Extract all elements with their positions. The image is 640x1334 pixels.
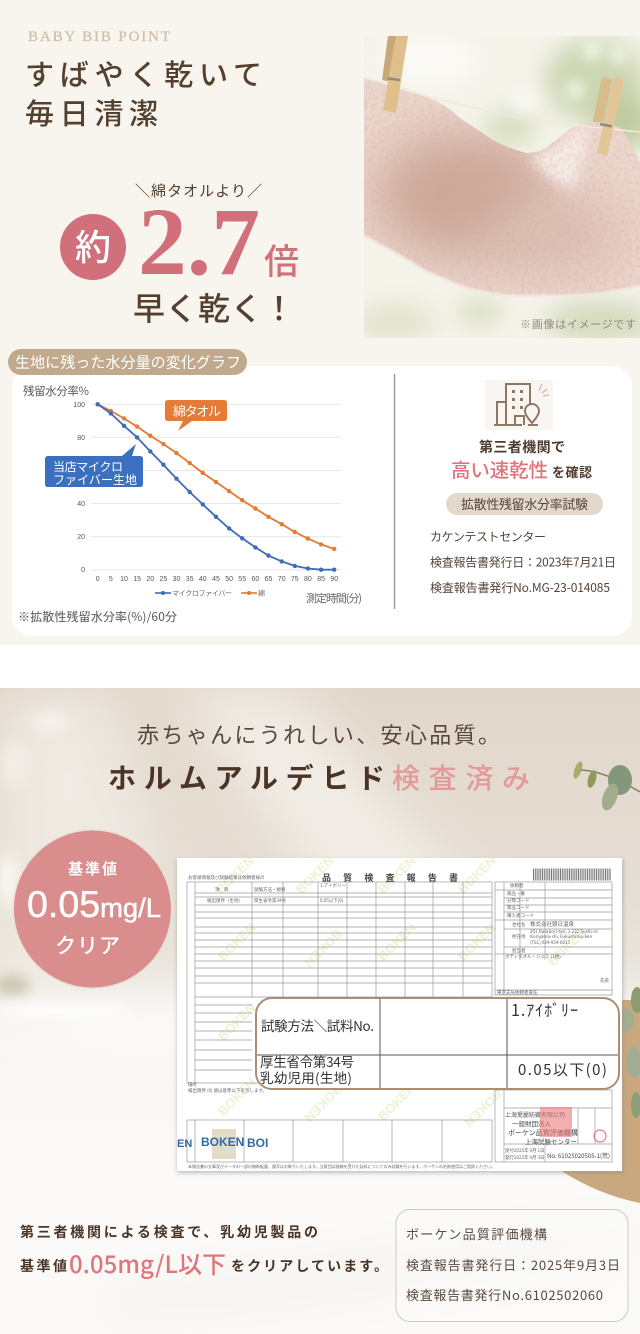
title: quick drying and clean xyxy=(25,52,262,133)
badge: standard value 0.05mg/L cleared: 0.05mg/L xyxy=(27,884,161,925)
watermark: BOKEN xyxy=(215,1075,259,1119)
logos: BOKEN: BOI xyxy=(247,1136,268,1150)
badge: standard value 0.05mg/L cleared: 基準値 xyxy=(68,858,117,879)
legend: 綿 xyxy=(258,588,265,598)
plant: leaves lower right xyxy=(620,987,640,1118)
plant: eucalyptus top right xyxy=(572,760,640,813)
line chart: remaining moisture: 測定時間(分) xyxy=(306,590,362,606)
callout: our microfiber fabric: ファイバー生地 xyxy=(53,471,137,488)
watermark: BOKEN xyxy=(375,1080,419,1124)
line chart: remaining moisture: 0 xyxy=(96,576,100,583)
watermark: BOKEN xyxy=(215,1000,259,1044)
callout: our microfiber fabric: 当店マイクロ xyxy=(53,458,123,475)
line chart: remaining moisture: 45 xyxy=(212,576,220,583)
tiny report text: 商品コード xyxy=(507,904,530,911)
line chart: remaining moisture: 10 xyxy=(120,576,128,583)
line chart: remaining moisture: 80 xyxy=(77,435,85,442)
certification stamp xyxy=(505,1107,610,1161)
logos: BOKEN: EN xyxy=(177,1138,192,1150)
line chart: remaining moisture: 35 xyxy=(186,576,194,583)
title: quick drying and clean: すばやく乾いて xyxy=(25,52,262,94)
tiny report text: 試験方法・規格 xyxy=(254,886,286,893)
clothespin right xyxy=(593,77,624,156)
pill: test name: 拡散性残留水分率試験 xyxy=(461,494,588,513)
logos: BOKEN xyxy=(177,1129,268,1159)
tiny report text: 1.アイボリー xyxy=(320,882,347,889)
line chart: remaining moisture: 60 xyxy=(252,576,259,583)
text: third-party testing statement: 第三者機関による検査で、乳幼児製品の xyxy=(20,1222,318,1242)
watermark: BOKEN xyxy=(375,853,419,897)
note: image for illustration: ※画像はイメージです xyxy=(520,316,636,332)
barcode xyxy=(533,868,611,880)
certification stamp: 上海愛麗紡織有限公司 xyxy=(505,1110,565,1119)
legend: マイクロファイバー xyxy=(172,588,232,598)
enlarged result box: 0.05以下(0) xyxy=(518,1059,607,1080)
info box: BOKEN report details xyxy=(396,1210,628,1322)
heading pill: graph title: 生地に残った水分量の変化グラフ xyxy=(15,352,241,372)
icon: office building xyxy=(485,380,553,430)
section background: formaldehyde test xyxy=(0,688,640,1334)
tiny report text: 0.05以下(0) xyxy=(320,898,344,904)
certification stamp: 一般財団法人 xyxy=(512,1118,552,1128)
callout: our microfiber fabric xyxy=(45,444,143,488)
text: third-party testing statement: 基準値 xyxy=(20,1256,67,1276)
enlarged result box: 1.ｱｲﾎﾞﾘｰ xyxy=(511,997,578,1021)
text block: test report details: 検査報告書発行日：2023年7月21日 xyxy=(430,554,616,570)
callout: cotton towel xyxy=(165,400,227,431)
line chart: remaining moisture: 75 xyxy=(291,576,299,583)
text: third-party testing statement: 0.05mg/L以下 xyxy=(69,1245,226,1280)
line chart: remaining moisture xyxy=(23,383,362,606)
watermark: BOKEN xyxy=(215,920,259,964)
tiny report text: 分類コード xyxy=(507,897,530,904)
enlarged result box xyxy=(256,997,619,1089)
title: quick drying and clean: 毎日清潔 xyxy=(25,91,158,133)
enlarged result box: 厚生省令第34号 xyxy=(260,1051,354,1071)
text: third-party confirmation: を確認 xyxy=(552,462,592,481)
towel xyxy=(364,70,640,310)
text: third-party confirmation: 高い速乾性 xyxy=(451,454,548,483)
tiny report text xyxy=(188,874,609,1170)
text block: test report details xyxy=(430,528,616,596)
tiny report text: 検出限界 (0) 値は基準以下を示します。 xyxy=(188,1087,267,1094)
line chart: remaining moisture: 15 xyxy=(133,576,141,583)
line chart: remaining moisture: 50 xyxy=(225,576,233,583)
main table lines xyxy=(187,882,612,1162)
line chart: remaining moisture: 0 xyxy=(81,567,85,574)
section background: quick drying xyxy=(0,0,640,645)
certification stamp: 発行2025年 9月 3日 xyxy=(505,1154,545,1161)
tiny report text: 先染 xyxy=(600,977,609,984)
clothesline xyxy=(364,78,640,132)
line chart: remaining moisture: 40 xyxy=(199,576,207,583)
badge: approx: 約 xyxy=(75,219,111,271)
tiny report text: 依頼者 xyxy=(510,882,524,889)
line chart: remaining moisture: 90 xyxy=(330,576,338,583)
report document: quality inspection report xyxy=(177,853,623,1173)
tiny report text: 商品・番 xyxy=(507,890,525,897)
heading: formaldehyde tested: ホルムアルデヒド xyxy=(108,757,385,797)
tiny report text: 備考 xyxy=(188,1081,197,1088)
line chart: remaining moisture: 20 xyxy=(77,534,85,541)
badge: approx xyxy=(60,214,126,280)
text block: test report details: カケンテストセンター xyxy=(430,528,546,545)
watermark: BOKEN xyxy=(301,926,345,970)
certification stamp: 上海試験センター xyxy=(525,1136,577,1146)
badge: standard value 0.05mg/L cleared xyxy=(12,829,172,989)
line chart: remaining moisture: 100 xyxy=(73,402,85,409)
line chart: remaining moisture: 40 xyxy=(77,501,85,508)
report title: 品質検査報告書 xyxy=(322,871,458,884)
certification stamp: 受付2025年 9月 1日 xyxy=(505,1147,545,1154)
big number: 2.7 times: 倍 xyxy=(264,234,299,285)
tiny report text: 東京支局依頼者責任 xyxy=(497,989,538,996)
heading: formaldehyde tested xyxy=(110,764,529,791)
watermark xyxy=(213,853,589,1130)
label: BABY BIB POINT: BABY BIB POINT xyxy=(28,29,170,45)
photo: towel on a clothesline xyxy=(355,35,640,344)
tiny report text: 会社名 xyxy=(512,921,526,928)
tiny report text: 本報告書の文章及びデータの一部の無断転載、複写はお断りいたします。当財団は依頼を受けた試料についてのみ試験を行います。ボーケンの名称使用はご相談ください。 xyxy=(188,1163,495,1170)
note: test basis: ※拡散性残留水分率(%)/60分 xyxy=(18,608,177,625)
line chart: remaining moisture: 30 xyxy=(173,576,180,583)
line chart: remaining moisture: 55 xyxy=(238,576,246,583)
tiny report text: 項 目 xyxy=(215,887,228,893)
info box: BOKEN report details: 検査報告書発行No.6102502060 xyxy=(406,1285,603,1304)
heading: formaldehyde tested: 検査済み xyxy=(392,757,530,797)
watermark: BOKEN xyxy=(455,920,499,964)
callout: cotton towel: 綿タオル xyxy=(173,401,221,420)
wood tray behind report xyxy=(563,1000,640,1203)
line chart: remaining moisture: 残留水分率% xyxy=(23,383,89,399)
info box: BOKEN report details: ボーケン品質評価機構 xyxy=(406,1224,547,1243)
watermark: BOKEN xyxy=(375,920,419,964)
clothespin left xyxy=(382,36,408,113)
tiny report text: 購入者コード xyxy=(507,912,534,919)
callout: compared with cotton towel: ＼綿タオルより／ xyxy=(135,180,262,201)
tiny report text: 201 Narabori-tari, 1-222 Sushi-iri xyxy=(530,928,598,935)
watermark: BOKEN xyxy=(293,853,337,897)
tiny report text: お客様情報及び試験結果は依頼者様の xyxy=(188,874,265,881)
text: dries faster: 早く乾く！ xyxy=(133,284,295,330)
text: third-party confirmation xyxy=(451,437,592,483)
tiny report text: (TEL) 024-954-8015 xyxy=(530,940,570,946)
certification stamp: No. 61025020505-1(荒) xyxy=(547,1151,610,1160)
enlarged result box: 試験方法＼試料No. xyxy=(261,1015,374,1035)
text: third-party testing statement: をクリアしています。 xyxy=(231,1256,388,1276)
line chart: remaining moisture: 70 xyxy=(278,576,286,583)
text: third-party testing statement xyxy=(20,1222,388,1280)
line chart: remaining moisture: 20 xyxy=(146,576,154,583)
watermark: BOKEN xyxy=(455,853,499,897)
tiny report text: 株式会社朝日温泉 xyxy=(530,920,575,928)
legend xyxy=(155,588,265,598)
line chart: remaining moisture: 5 xyxy=(109,576,113,583)
watermark: BOKEN xyxy=(461,1086,505,1130)
tiny report text: Koriyama-shi, Fukushima-ken xyxy=(530,933,592,940)
tiny report text: 担当者 xyxy=(512,947,526,954)
big number: 2.7 times: 2.7 xyxy=(138,188,260,295)
enlarged result box: 乳幼児用(生地) xyxy=(260,1067,352,1087)
logos: BOKEN: BOKEN xyxy=(201,1135,244,1149)
tiny report text: 検出限界（生地） xyxy=(207,897,243,904)
heading: safe quality for babies: 赤ちゃんにうれしい、安心品質。 xyxy=(137,718,500,750)
watermark: BOKEN xyxy=(301,1081,345,1125)
info box: BOKEN report details: 検査報告書発行日：2025年9月3日 xyxy=(406,1255,620,1274)
text block: test report details: 検査報告書発行No.MG-23-014085 xyxy=(430,579,610,596)
line chart: remaining moisture: 85 xyxy=(317,576,325,583)
tiny report text: 所在地 xyxy=(512,933,526,940)
pill: test name xyxy=(446,493,603,515)
certification stamp: ボーケン品質評価機構 xyxy=(508,1128,578,1138)
line chart: remaining moisture: 25 xyxy=(160,576,167,583)
panel: graph and test information xyxy=(8,349,632,636)
tiny report text: 厚生省令第34号 xyxy=(254,897,286,904)
line chart: remaining moisture: 80 xyxy=(304,576,312,583)
watermark: BOKEN xyxy=(213,853,257,897)
line chart: remaining moisture: 65 xyxy=(265,576,272,583)
tiny report text: ボディタオル・ジェミ (1枚) xyxy=(505,953,561,960)
text: third-party confirmation: 第三者機関で xyxy=(479,437,565,457)
badge: standard value 0.05mg/L cleared: クリア xyxy=(55,930,120,960)
watermark: BOKEN xyxy=(545,925,589,969)
